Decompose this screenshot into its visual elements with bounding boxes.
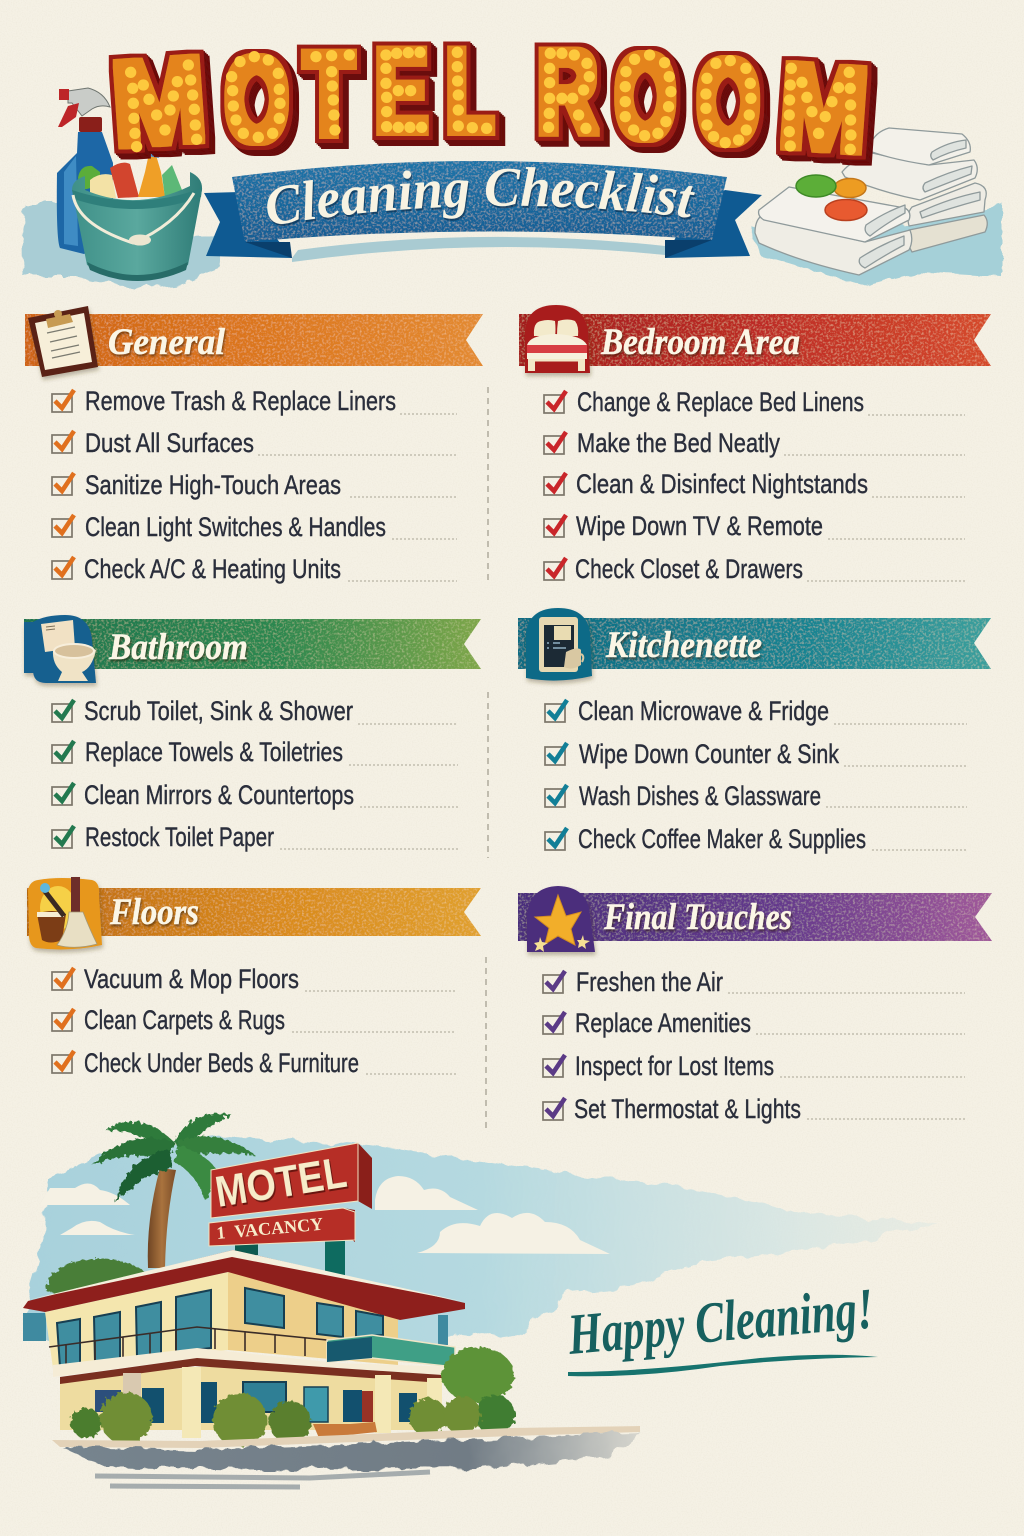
Bathroom heading ribbon — [24, 619, 481, 669]
upper windows — [57, 1288, 383, 1367]
balcony floor — [53, 1348, 458, 1377]
checklist items: Change & Replace Bed Linens — [577, 387, 864, 417]
soaps — [796, 175, 867, 220]
checklist items: Freshen the Air — [576, 967, 723, 997]
main title: MOTEL ROOM: R — [537, 24, 598, 158]
main title: MOTEL ROOM: M — [107, 32, 211, 172]
checklist items: Check Coffee Maker & Supplies — [578, 824, 866, 854]
palm tree — [92, 1114, 255, 1268]
closing message: Happy Cleaning! — [565, 1276, 878, 1376]
panel: Bedroom Area — [519, 305, 991, 584]
icon: bed — [525, 305, 590, 373]
pillars — [123, 1367, 442, 1438]
Final Touches title: Final Touches — [603, 897, 792, 938]
checklist items: Vacuum & Mop Floors — [84, 964, 299, 994]
panel: Kitchenette — [518, 608, 991, 854]
divider — [487, 692, 489, 858]
motel building — [23, 1250, 465, 1438]
sign text VACANCY: 1 VACANCY — [216, 1214, 324, 1243]
sky wash — [24, 1136, 940, 1345]
main title: MOTEL ROOM — [107, 23, 872, 178]
checklist items: Make the Bed Neatly — [577, 428, 780, 458]
checklist items: Replace Amenities — [575, 1008, 751, 1038]
panel: Floors — [27, 877, 486, 1132]
checklist items — [52, 696, 458, 852]
divider — [487, 387, 489, 581]
icon: clipboard — [28, 306, 98, 377]
main title: MOTEL ROOM: O — [615, 30, 676, 164]
Bathroom title: Bathroom — [108, 627, 248, 668]
header illustration — [21, 54, 1004, 290]
icon: coffee maker — [526, 608, 592, 681]
sidewalk — [52, 1426, 640, 1448]
checklist items: Clean & Disinfect Nightstands — [576, 469, 868, 499]
balcony railing — [49, 1327, 327, 1366]
checklist items: Wash Dishes & Glassware — [579, 781, 821, 811]
checklist items: Set Thermostat & Lights — [574, 1094, 801, 1124]
checklist items: Check Closet & Drawers — [575, 554, 803, 584]
Kitchenette heading ribbon — [518, 618, 991, 669]
main title: MOTEL ROOM: T — [304, 26, 354, 161]
back trees — [45, 1259, 146, 1295]
checklist items: Replace Towels & Toiletries — [85, 737, 343, 767]
roof — [23, 1250, 465, 1320]
checklist items — [52, 386, 457, 584]
checklist items — [543, 967, 965, 1124]
motel scene illustration — [23, 1114, 940, 1487]
checklist items: Check A/C & Heating Units — [84, 554, 341, 584]
Kitchenette title: Kitchenette — [605, 625, 762, 666]
General heading ribbon — [25, 314, 483, 366]
bucket with supplies — [72, 152, 202, 281]
checklist items: Clean Mirrors & Countertops — [84, 780, 354, 810]
sign text MOTEL: MOTEL — [212, 1148, 350, 1217]
columns behind — [23, 1313, 46, 1341]
main title: MOTEL ROOM: O — [697, 35, 760, 169]
main title: MOTEL ROOM: L — [446, 24, 494, 158]
main title: MOTEL ROOM: E — [375, 23, 428, 158]
checklist items: Wipe Down TV & Remote — [576, 511, 823, 541]
ribbon shadow — [292, 237, 665, 262]
blue ribbon banner — [204, 161, 762, 258]
blue wash right — [750, 203, 1002, 286]
checklist items: Sanitize High-Touch Areas — [85, 470, 341, 500]
main title: MOTEL ROOM: O — [225, 32, 288, 167]
steps — [313, 1422, 377, 1438]
Floors title: Floors — [109, 892, 199, 933]
checklist items — [52, 964, 456, 1078]
Floors heading ribbon — [27, 888, 481, 936]
General title: General — [108, 322, 226, 363]
panel: Final Touches — [518, 886, 992, 1124]
checklist items: Scrub Toilet, Sink & Shower — [84, 696, 353, 726]
icon: toilet — [24, 615, 96, 683]
Bedroom title: Bedroom Area — [600, 322, 800, 363]
checklist items: Restock Toilet Paper — [85, 822, 274, 852]
clouds — [40, 1176, 610, 1254]
panel: Bathroom — [24, 615, 488, 858]
lower doors and windows — [95, 1382, 417, 1423]
checklist items — [545, 696, 967, 854]
checklist items: Clean Microwave & Fridge — [578, 696, 829, 726]
checklist items: Wipe Down Counter & Sink — [579, 739, 839, 769]
green balcony panel — [327, 1335, 455, 1367]
checklist items: Clean Light Switches & Handles — [85, 512, 386, 542]
checklist items: Inspect for Lost Items — [575, 1051, 774, 1081]
Final Touches heading ribbon — [518, 893, 992, 941]
Bedroom heading ribbon — [519, 314, 991, 366]
blue wash left — [23, 203, 222, 288]
road — [62, 1432, 640, 1470]
panel: General — [25, 306, 488, 584]
walls — [45, 1272, 228, 1368]
checklist items: Remove Trash & Replace Liners — [85, 386, 396, 416]
main title: MOTEL ROOM: M — [775, 38, 872, 178]
icon: broom and bucket — [28, 877, 102, 949]
closing message: Happy Cleaning!: Happy Cleaning! — [565, 1276, 876, 1367]
motel sign — [209, 1143, 372, 1276]
spray bottle — [57, 88, 113, 254]
checklist items: Check Under Beds & Furniture — [84, 1048, 359, 1078]
checklist items: Clean Carpets & Rugs — [84, 1005, 285, 1035]
icon: stars — [527, 886, 595, 952]
divider — [485, 957, 487, 1132]
checklist items — [544, 387, 965, 584]
marquee bulbs — [125, 47, 857, 155]
bushes — [71, 1347, 515, 1447]
checklist items: Dust All Surfaces — [85, 428, 254, 458]
road streaks — [95, 1472, 430, 1487]
banner subtitle: Cleaning Checklist — [267, 167, 696, 226]
towel stack — [755, 128, 987, 275]
